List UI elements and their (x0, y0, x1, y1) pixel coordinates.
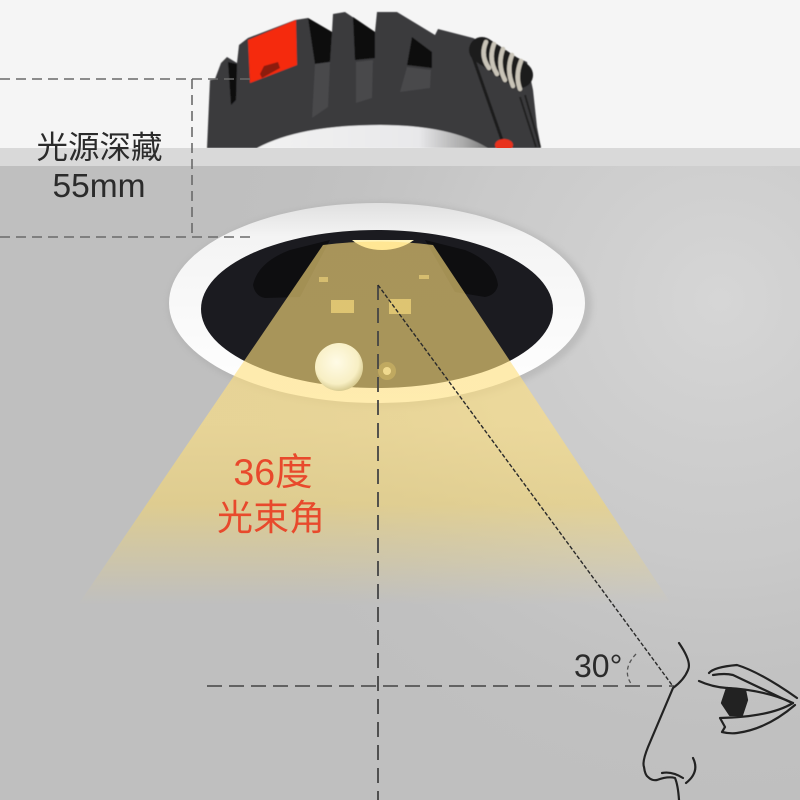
label: beam angle 36 degrees: 光束角 (217, 497, 325, 538)
fin shadows (228, 17, 432, 105)
recessed gimbal pods (253, 240, 330, 298)
spring wire (473, 57, 502, 140)
small sensor (378, 362, 396, 380)
black inner cavity (201, 230, 553, 388)
label: source depth 55mm: 55mm (52, 168, 146, 205)
upper lid (699, 681, 793, 703)
white lens underside (257, 125, 488, 148)
torsion spring (482, 42, 521, 89)
dimension: source depth (0, 79, 256, 237)
ceiling edge strip (0, 148, 800, 166)
red wire tip (495, 139, 513, 151)
label: source depth 55mm: 光源深藏 (36, 129, 163, 165)
white trim ring (169, 203, 585, 403)
label: beam angle 36 degrees (217, 451, 325, 538)
iris (722, 688, 747, 715)
downlight housing (207, 12, 541, 151)
angle arc (627, 654, 636, 685)
icon: face profile with eye (644, 643, 797, 800)
lens reflections (319, 275, 429, 314)
horizontal sight dashed line (207, 685, 674, 687)
upper lid crease (713, 674, 792, 703)
red clip (248, 20, 297, 83)
label: 30 degrees: 30° (574, 648, 622, 684)
soft shadow around ring (168, 202, 592, 408)
PIR sensor dome (315, 343, 363, 391)
nose profile (644, 643, 689, 800)
lens glow (352, 240, 414, 250)
label: beam angle 36 degrees: 36度 (233, 451, 313, 493)
ceiling surface (0, 166, 800, 800)
label: source depth 55mm (36, 129, 163, 205)
lower lid (720, 703, 795, 733)
downlight face (169, 203, 585, 403)
vertical axis dashed line (377, 285, 379, 800)
brow (709, 665, 797, 698)
light beam cone (78, 242, 672, 605)
background: room above ceiling (0, 0, 800, 148)
diagonal sight line (378, 285, 672, 685)
